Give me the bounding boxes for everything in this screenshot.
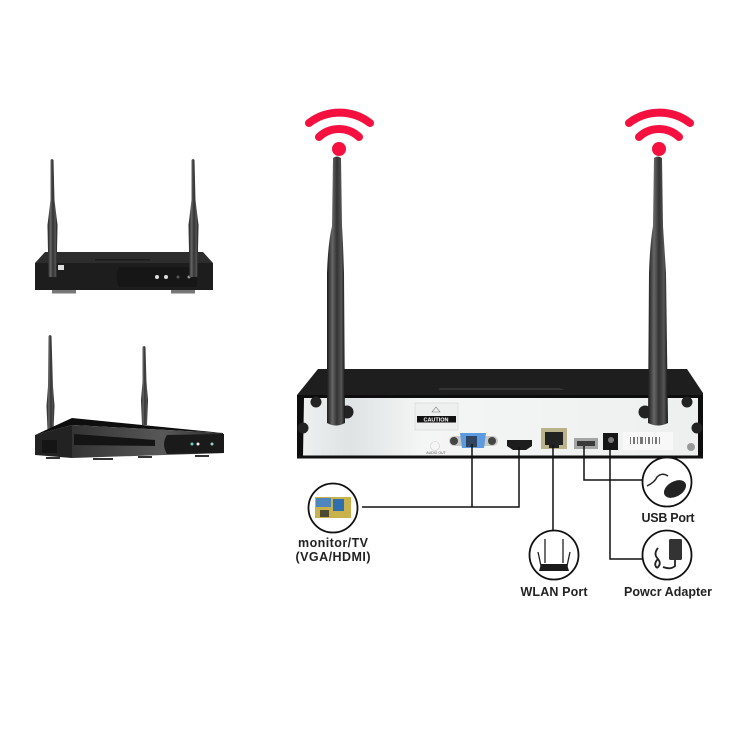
right antenna (648, 156, 668, 426)
label: monitor/TV: monitor/TV (298, 536, 369, 550)
audio out port: AUDIO OUT (426, 451, 447, 455)
power jack (603, 433, 618, 450)
HDMI port (507, 440, 532, 450)
device: angled view recorder (35, 335, 224, 460)
main recorder rear view (297, 369, 703, 458)
icon: monitor/TV (308, 484, 358, 532)
icon: left wifi signal (309, 113, 370, 156)
label: WLAN Port: WLAN Port (520, 585, 588, 599)
connector lines (362, 444, 642, 559)
VGA port (449, 433, 498, 448)
device: front view recorder (35, 159, 213, 294)
icon: power adapter (642, 530, 692, 580)
label: Powcr Adapter: Powcr Adapter (624, 585, 712, 599)
caution label: CAUTION (423, 418, 449, 424)
LAN port (541, 428, 567, 449)
label: VGA/HDMI: (VGA/HDMI) (296, 550, 370, 564)
audio out port (426, 442, 447, 455)
USB port (574, 438, 598, 449)
caution label (415, 403, 458, 430)
icon: right wifi signal (629, 113, 690, 156)
label: USB Port: USB Port (642, 511, 695, 525)
icon: USB mouse (642, 458, 692, 506)
icon: router (530, 530, 578, 580)
left antenna (327, 156, 345, 426)
barcode sticker (623, 432, 673, 450)
